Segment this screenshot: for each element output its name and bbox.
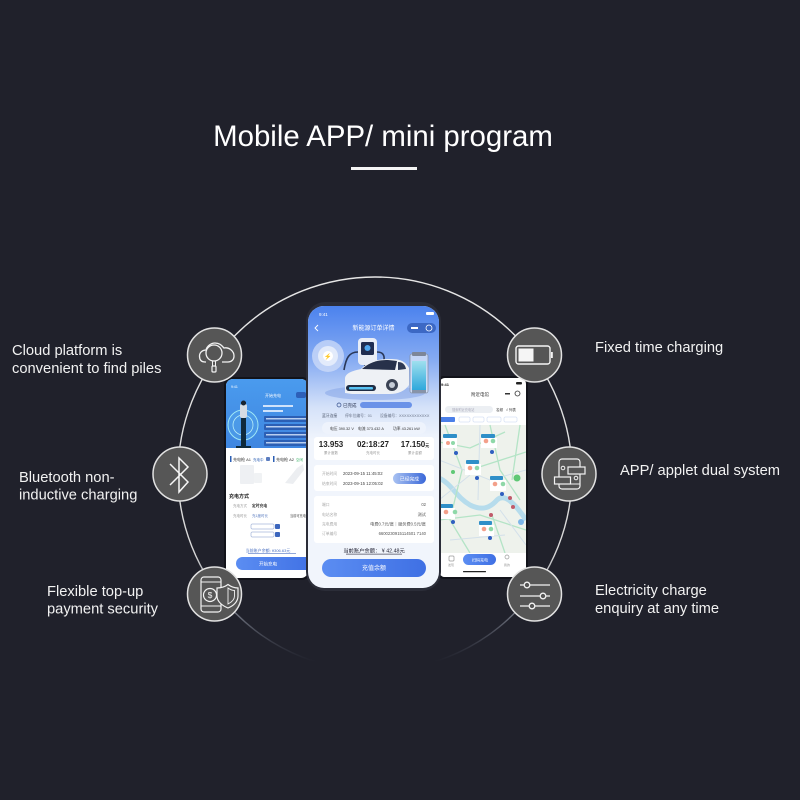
right phone: map screen: 名频 bbox=[496, 407, 504, 412]
time card: 开始时间 bbox=[322, 471, 337, 476]
stats card: 02:18:27 bbox=[357, 440, 390, 449]
left phone: charging pile screen: 开始充电 bbox=[265, 392, 281, 398]
label: electricity enquiry: Electricity charge bbox=[595, 583, 707, 599]
stats card: 充电时长 bbox=[366, 450, 380, 455]
left phone: charging pile screen: 9:41 bbox=[231, 385, 238, 389]
right phone: map screen: 扫码充电 bbox=[472, 556, 488, 562]
wireless signal disc: ⚡ bbox=[324, 352, 332, 360]
right phone: map screen: √ 列表 bbox=[506, 407, 516, 412]
right phone: map screen bbox=[437, 376, 528, 579]
left phone: charging pile screen: 当前账户余额: ¥306.63元 bbox=[246, 547, 290, 553]
center phone: charging order detail screen: 功率 43.261 kW bbox=[393, 426, 420, 431]
recharge button: 充值余额 bbox=[362, 564, 386, 572]
stats card: 13.953 bbox=[319, 440, 344, 449]
battery bbox=[410, 352, 428, 393]
right phone: map screen: 搜索附近充电站 bbox=[452, 407, 475, 412]
left phone: charging pile screen: 空闲 bbox=[296, 457, 304, 462]
icon: payment security bbox=[188, 567, 242, 621]
recharge button bbox=[322, 559, 426, 577]
title underline bbox=[351, 167, 417, 170]
label: top-up payment: payment security bbox=[47, 602, 159, 618]
label: fixed time charging: Fixed time charging bbox=[595, 340, 723, 356]
left phone: charging pile screen bbox=[224, 377, 316, 580]
icon: sliders bbox=[508, 567, 562, 621]
center phone: charging order detail screen: 新能源订单详情 bbox=[352, 324, 395, 332]
center phone: charging order detail screen: 设备编号：XXXXXXXXXXXX bbox=[380, 413, 430, 418]
order detail card: 6600230915114501 7140 bbox=[379, 531, 427, 536]
label: dual system: APP/ applet dual system bbox=[620, 463, 780, 479]
order detail card: 端口 bbox=[322, 502, 330, 507]
map bbox=[439, 425, 526, 553]
car bbox=[345, 359, 409, 394]
stats card bbox=[314, 437, 434, 460]
left phone: charging pile screen: 充电方式 bbox=[229, 493, 249, 500]
icon: cloud search bbox=[188, 328, 242, 382]
title: Mobile APP/ mini program bbox=[213, 120, 553, 153]
label: bluetooth charging: inductive charging bbox=[19, 488, 137, 504]
right phone: map screen: 我的 bbox=[504, 562, 510, 567]
charger bbox=[344, 338, 384, 373]
center phone: charging order detail screen: 停车位编号：01 bbox=[345, 413, 372, 418]
order detail card: 电费0.7元/度｜服务费0.5元/度 bbox=[370, 520, 427, 528]
center phone: charging order detail screen: 已完成 bbox=[343, 402, 357, 409]
label: electricity enquiry: enquiry at any time bbox=[595, 601, 719, 617]
left phone: charging pile screen: 充电方式 bbox=[233, 503, 247, 508]
wireless signal disc bbox=[312, 340, 344, 372]
stats card: 17.150元 bbox=[401, 440, 429, 449]
time card: 结束时间 bbox=[322, 481, 337, 486]
center phone: charging order detail screen bbox=[306, 302, 441, 591]
left phone: charging pile screen: 定时充电 bbox=[252, 503, 267, 508]
icon: payment security: $ bbox=[208, 590, 213, 600]
order detail card: 充电费用 bbox=[322, 522, 337, 526]
time card: 2023-09-15 12:05:02 bbox=[343, 481, 384, 486]
order detail card: 订单编号 bbox=[322, 531, 337, 536]
orbit ring bbox=[178, 277, 572, 671]
center phone: charging order detail screen: 9:41 bbox=[319, 312, 328, 317]
time card: 2023-09-15 11:45:02 bbox=[343, 471, 383, 476]
left phone: charging pile screen: 充电枪 A2 bbox=[276, 456, 295, 462]
order detail card bbox=[314, 496, 434, 543]
label: bluetooth charging: Bluetooth non- bbox=[19, 470, 115, 486]
left phone: charging pile screen: 充电时长 bbox=[233, 513, 247, 518]
icon: battery bbox=[508, 328, 562, 382]
label: cloud platform: convenient to find piles bbox=[12, 361, 161, 377]
icon: app and applet bbox=[542, 447, 596, 501]
left phone: charging pile screen: 当前可充电 bbox=[290, 513, 307, 518]
stats card: 累计度数 bbox=[324, 450, 338, 455]
right phone: map screen: 发现 bbox=[448, 562, 454, 567]
time card: 已经完成 bbox=[400, 476, 419, 482]
left phone: charging pile screen: 充电中 bbox=[253, 457, 264, 462]
label: cloud platform: Cloud platform is bbox=[12, 343, 122, 359]
left phone: charging pile screen: 充1度时长 bbox=[252, 513, 268, 518]
right phone: map screen: 附近电馆 bbox=[471, 391, 489, 398]
center phone: charging order detail screen: 电压 390.32 V bbox=[330, 426, 354, 431]
center phone: charging order detail screen: 蓝牙连接 bbox=[322, 413, 337, 418]
right phone: map screen: 9:41 bbox=[441, 382, 450, 387]
stats card: 累计金额 bbox=[408, 450, 422, 455]
center phone: charging order detail screen: 电流 373.432 A bbox=[358, 426, 384, 431]
left phone: charging pile screen: 开始充电 bbox=[259, 560, 277, 568]
left phone: charging pile screen: 充电枪 A1 bbox=[233, 456, 252, 462]
order detail card: 02 bbox=[421, 502, 427, 507]
time card bbox=[314, 465, 434, 491]
label: top-up payment: Flexible top-up bbox=[47, 584, 143, 600]
order detail card: 测试 bbox=[418, 511, 427, 518]
balance: 当前账户余额： ¥ 42.48元 bbox=[343, 546, 405, 554]
icon: bluetooth bbox=[153, 447, 207, 501]
order detail card: 电站名称 bbox=[322, 512, 337, 517]
